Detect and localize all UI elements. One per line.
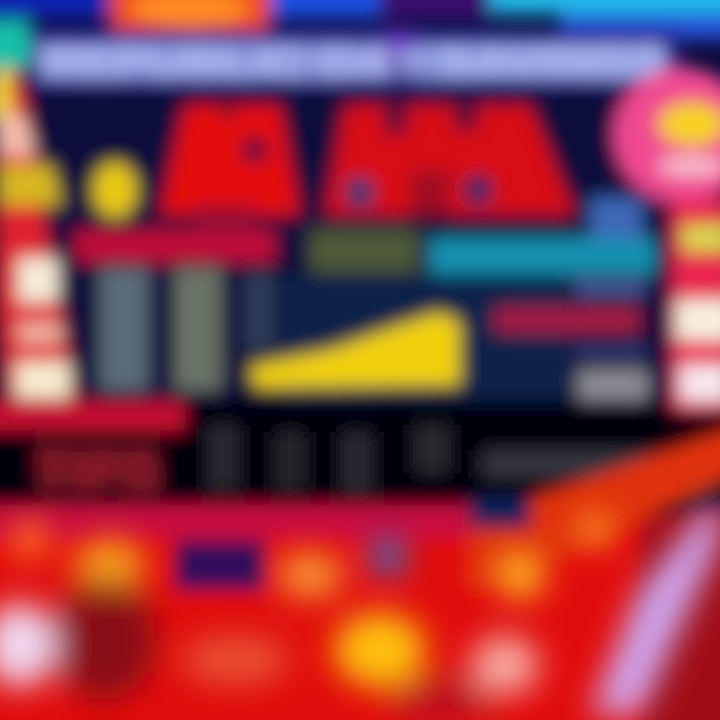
background: dark middle panel (0, 85, 720, 510)
title: REPUBLIC DAY SAVINGS (42, 38, 667, 85)
heading: red headline right (325, 100, 575, 215)
bar chart: grey columns (100, 268, 273, 390)
yellow area chart (250, 312, 460, 388)
grey stat box (578, 370, 648, 400)
pink legend rows (495, 280, 645, 357)
top banner strip (0, 0, 720, 70)
olive sub-heading (310, 230, 418, 272)
red label band (75, 230, 275, 262)
grey icon row (208, 425, 449, 494)
lower festive panel (0, 425, 720, 720)
left decorative striped column (0, 70, 75, 400)
right decorative stripes (672, 200, 720, 410)
grey text block (482, 450, 652, 478)
lower panel lights (0, 512, 613, 720)
title (30, 30, 680, 86)
right decorative circle (614, 67, 720, 203)
purple light streak (590, 490, 720, 715)
icon: yellow circle (93, 162, 137, 218)
heading: red headline left (160, 100, 300, 225)
red text block: TIPS (35, 444, 160, 502)
teal band (430, 198, 655, 274)
red caption band (0, 402, 185, 430)
